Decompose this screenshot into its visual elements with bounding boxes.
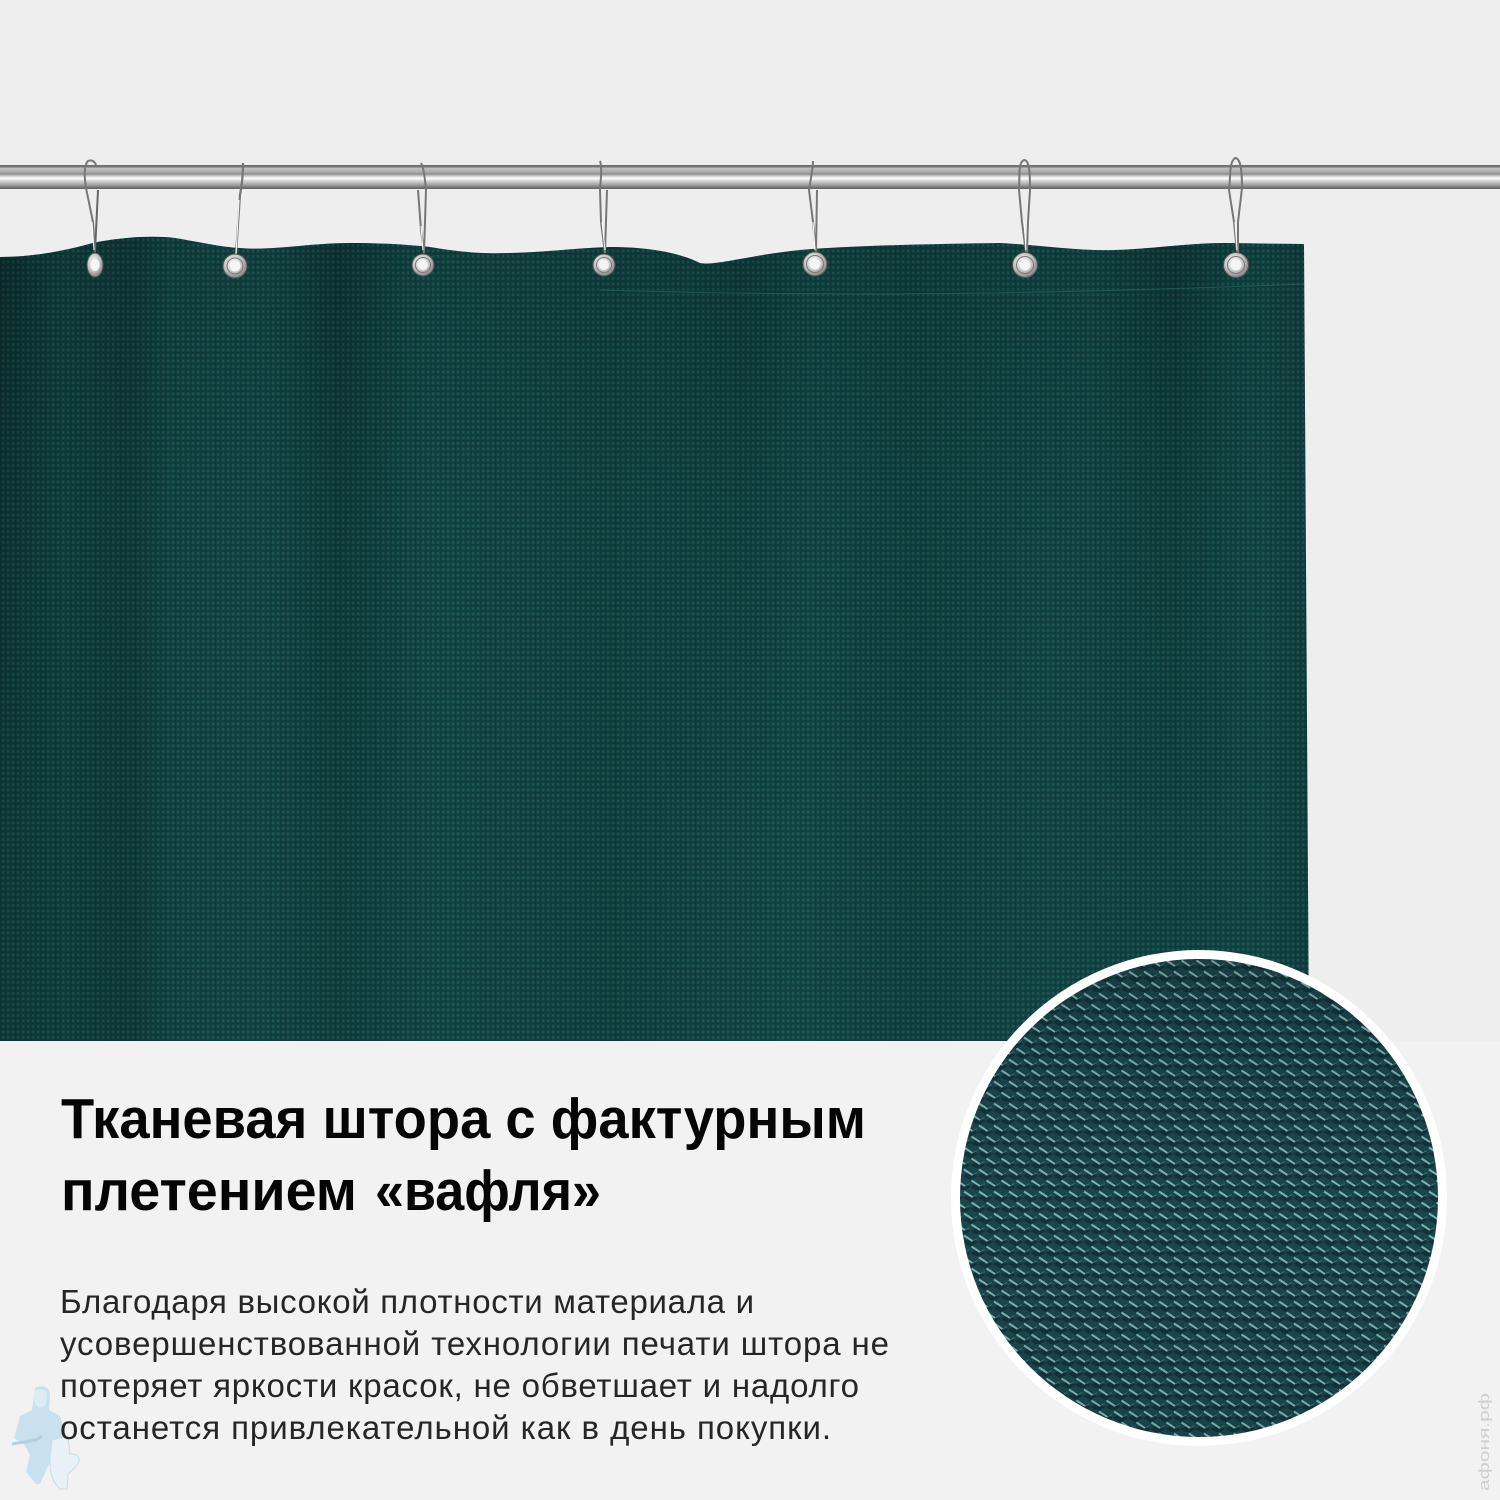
hook and grommet 4 (593, 161, 615, 276)
fabric detail circle (951, 950, 1447, 1446)
hook and grommet 3 (412, 163, 434, 276)
heading: плетением (61, 1159, 357, 1223)
hook and grommet 1 (85, 160, 103, 277)
curtain fabric (0, 237, 1309, 1041)
body text: останется привлекательной как в день покупки. (60, 1409, 831, 1446)
curtain rod (0, 165, 1500, 189)
hook and grommet 7 (1224, 158, 1248, 278)
body text: потеряет яркости красок, не обветшает и надолго (60, 1367, 859, 1404)
body text (60, 1283, 889, 1446)
watermark: site name: афоня.рф (1476, 1393, 1493, 1491)
body text: усовершенствованной технологии печати штора не (60, 1325, 889, 1362)
bottom panel (0, 1041, 1500, 1500)
heading: «вафля» (375, 1159, 601, 1223)
heading (61, 1087, 866, 1223)
body text: Благодаря высокой плотности материала и (60, 1283, 754, 1320)
heading: Тканевая штора с фактурным (61, 1087, 866, 1151)
hook and grommet 6 (1012, 160, 1038, 278)
watermark: plumber (12, 1386, 79, 1489)
hook and grommet 5 (803, 161, 827, 276)
hook and grommet 2 (223, 163, 247, 278)
